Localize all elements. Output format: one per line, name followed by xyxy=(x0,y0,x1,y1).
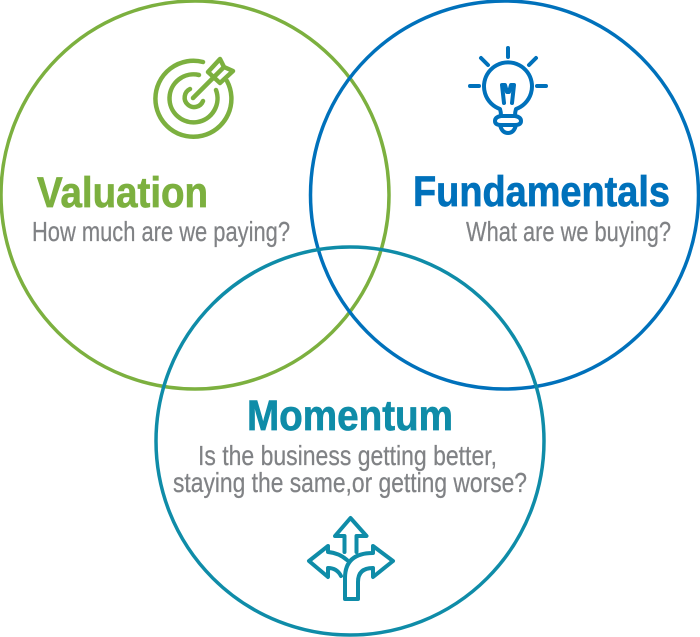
heading: Valuation: Valuation xyxy=(37,169,208,217)
text: momentum question: Is the business getting better, xyxy=(198,440,497,471)
icon: target with arrow xyxy=(155,59,233,137)
text: momentum question xyxy=(173,440,527,498)
icon: three-way arrows xyxy=(309,518,393,599)
heading: Fundamentals: Fundamentals xyxy=(413,168,670,216)
circle: fundamentals xyxy=(310,1,698,389)
circle: valuation xyxy=(1,1,389,389)
text: valuation question: How much are we paying? xyxy=(32,216,290,247)
icon: light bulb xyxy=(470,48,546,133)
circle: momentum xyxy=(156,247,544,635)
heading: Momentum: Momentum xyxy=(247,392,453,440)
text: momentum question: staying the same,or getting worse? xyxy=(173,467,527,498)
